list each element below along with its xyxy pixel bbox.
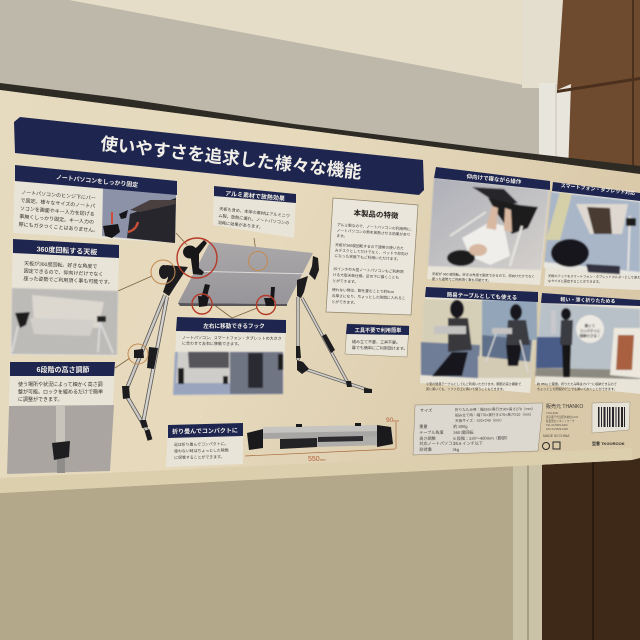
- caption: 小型の簡易テーブルとしてもご利用いただけます。脚部の高さ調節で: [426, 381, 521, 386]
- caption: [537, 381, 617, 391]
- spec values: 360 度回転: [453, 429, 474, 435]
- body text: ノートパソコン、スマートフォン・タブレットの大きさ: [182, 334, 282, 341]
- body text: になった状態でもご利用いただけます。: [334, 253, 401, 261]
- spec values: 折りたたみ時：幅550×奥行き90×高さ270（mm）: [455, 406, 535, 412]
- body text: ノートパソコンの熱を放熱させる効果があり: [337, 227, 411, 237]
- made in china: MADE IN CHINA: [543, 434, 570, 438]
- panel header: [168, 423, 243, 438]
- panel header: [10, 362, 115, 376]
- product: folded stand with dimensions: [245, 417, 399, 463]
- body text: 消耗に効果があります。: [217, 219, 263, 231]
- dimension lines: [245, 422, 396, 456]
- body text: 固定できるので、仰向けだけでなく: [24, 267, 104, 278]
- vendor name: 販売元 THANKO: [546, 403, 583, 410]
- spec values: 約 850g: [453, 423, 468, 429]
- photo: woman using tablet in bed: [544, 192, 640, 276]
- spec labels: サイズ: [420, 407, 432, 413]
- panel header: [13, 239, 119, 258]
- body text: アルミ製なので、ノートパソコンの利用時に、: [337, 222, 414, 232]
- body text: 誰でも簡単にご利用頂けます。: [352, 344, 408, 351]
- body text: の厚さになり、ちょっとした隙間に入れるこ: [332, 293, 406, 301]
- spec labels: [419, 407, 456, 452]
- caption: 約 850g と軽量。折りたたみ時はカバーに収納できるので: [537, 381, 617, 386]
- spec labels: 重量: [419, 423, 427, 429]
- body text: 際にもガタつくことはありません。: [18, 221, 98, 234]
- body text: 組み立て不要、工具不要。: [352, 338, 400, 345]
- spec values: 3kg: [452, 447, 460, 452]
- body text: ける大型天板仕様。足の下に置くことも: [333, 272, 400, 280]
- panel header: [176, 317, 286, 333]
- photo panel: smartphone and tablet: [544, 182, 640, 290]
- panel header: [214, 186, 296, 203]
- body text: 使わない時は、脚を畳むことで約9cm: [332, 287, 394, 294]
- photo: rotating top: [11, 288, 118, 355]
- body text: ノートパソコンのヒンジ下にバー: [21, 190, 96, 202]
- spec labels: 高さ調整: [419, 435, 436, 441]
- photo: woman holding folded stand: 軽くて: [585, 323, 596, 328]
- photo: woman on sofa with table: [421, 299, 537, 378]
- body text: [217, 205, 290, 233]
- spec values: 組み立て時：幅770×奥行き470×高さ510（mm）: [455, 412, 534, 417]
- caption: [548, 273, 640, 285]
- photo: laptop hinge bar: [102, 188, 176, 243]
- panel header: [15, 165, 177, 195]
- vendor address: T101-0021: [546, 411, 559, 415]
- photo panel: operating lying down: [427, 167, 550, 285]
- title text: 使いやすさを追求した様々な機能: [99, 134, 363, 182]
- spec labels: テーブル角度: [419, 429, 444, 435]
- body text: ム製。放熱に優れ、ノートパソコンの: [218, 212, 290, 226]
- body text: 使わない時はちょっとした隙間: [174, 448, 229, 453]
- heading text: 仰向けで寝ながら操作: [466, 172, 522, 186]
- dimension 90mm: 90mm: [386, 417, 399, 424]
- barcode bars: [598, 407, 625, 427]
- heading text: 6段階の高さ調節: [37, 365, 89, 374]
- body text: とができます。: [332, 299, 357, 305]
- photo panel: light and thin folding: [535, 293, 640, 394]
- body text: [332, 287, 406, 307]
- body text: [334, 242, 409, 262]
- caption: 床に置いても、ソファの上に置いて使うこともできます。: [426, 386, 506, 391]
- body text: [352, 338, 408, 351]
- body text: に保管することができます。: [174, 454, 224, 460]
- spec values: 15.6 インチ以下: [453, 441, 483, 446]
- body text: 天板も含め、本体の素材はアルミニウ: [219, 205, 290, 219]
- heading text: アルミ素材で放熱効果: [225, 189, 285, 203]
- left stand legs: [122, 265, 188, 440]
- vendor address: 秋葉原ロジネットワーク: [546, 419, 575, 423]
- vendor address: FAX 03-5529-4205: [546, 427, 568, 431]
- panel header: [434, 167, 550, 190]
- spec table: [413, 403, 543, 455]
- body text: みデスクとしてだけでなく、ベッドで仰向け: [335, 247, 409, 256]
- body text: [174, 441, 229, 460]
- body text: ます。: [336, 233, 347, 239]
- barcode: [592, 402, 630, 446]
- red callout circles: [177, 238, 276, 314]
- panel: movable hooks: [173, 317, 286, 395]
- spec labels: 対応ノートパソコン: [419, 440, 456, 446]
- orange callout circles: [128, 252, 268, 364]
- body text: 天板が360度回転するので通常の使い方た: [335, 242, 404, 251]
- caption: なサイズに固定することができます。: [548, 278, 602, 284]
- body text: [336, 222, 414, 243]
- body text: [18, 381, 103, 403]
- photo: height lock: [7, 405, 114, 474]
- product box: [0, 83, 640, 493]
- vendor address: [546, 411, 579, 431]
- body text: 座った姿勢でご利用頂く事も可能です。: [23, 275, 113, 286]
- spec values: [452, 406, 536, 452]
- spec labels: 耐荷重: [419, 446, 432, 452]
- photo: woman holding folded stand: 収納できる！: [580, 333, 600, 338]
- panel: folds compact: [166, 423, 243, 467]
- body text: 足は折り畳んでコンパクトに。: [174, 441, 228, 447]
- table top plate: [178, 242, 313, 304]
- folded stand: [247, 423, 393, 450]
- product: laptop table with stand: [122, 238, 372, 440]
- photo: woman holding folded stand: コンパクトに: [580, 328, 601, 333]
- body text: 使う場所や状況によって細かく高さ調: [18, 381, 103, 388]
- caption: 座った姿勢でご利用頂く事も可能です。: [432, 276, 491, 283]
- body text: 事無くしっかり固定。キー入力の: [19, 213, 94, 226]
- model number: 型番 TKGOROOK: [592, 440, 625, 446]
- heading text: ノートパソコンをしっかり固定: [56, 173, 139, 189]
- spec values: 6 段階：330〜480mm（脚部）: [453, 434, 510, 441]
- body text: で固定。様々なサイズのノートパ: [20, 197, 95, 210]
- heading text: スマートフォン・タブレット対応: [560, 182, 636, 197]
- heading text: 折り畳んでコンパクトに: [172, 426, 238, 436]
- heading text: 工具不要で利用簡単: [355, 326, 401, 334]
- heading text: 簡易テーブルとしても使える: [447, 290, 517, 302]
- panel: height adjustment: [7, 362, 115, 474]
- body text: とができます。: [332, 278, 358, 284]
- body text: [332, 266, 404, 286]
- photo: hooks and laptop: [173, 352, 283, 395]
- panel: product features: [326, 198, 418, 315]
- photo: woman holding folded stand: [535, 303, 640, 379]
- vendor address: 東京都千代田区外神田4-6-8: [546, 415, 579, 419]
- body text: [18, 190, 101, 234]
- heading text: 左右に移動できるフック: [203, 322, 265, 330]
- panel: aluminium: [213, 186, 296, 238]
- caption: 天板が 360 度回転。好きな角度で固定できるので、仰向けだけでなく: [432, 271, 535, 279]
- body text: [182, 334, 282, 347]
- heading text: 360度回転する天板: [36, 244, 98, 257]
- panel: 360 degree rotation: [10, 239, 119, 356]
- body text: [23, 260, 114, 286]
- title banner: [14, 117, 424, 195]
- body text: に調整ができます。: [18, 396, 63, 403]
- panel header: [552, 182, 640, 201]
- right stand legs: [296, 256, 372, 393]
- vendor information: [542, 403, 583, 450]
- body text: に合わせて左右に移動できます。: [182, 340, 242, 346]
- vendor address: TEL 03-5529-4200: [546, 423, 568, 427]
- panel header: [346, 324, 409, 335]
- heading: 本製品の特徴: [353, 207, 399, 221]
- caption: [432, 271, 535, 284]
- body text: 15インチの大型ノートパソコンもご利用頂: [333, 266, 404, 274]
- heading text: 軽い・薄く折りたためる: [560, 296, 616, 305]
- recycling icons: [542, 442, 560, 450]
- body text: ソコンを画面やキー入力を妨げる: [20, 205, 95, 218]
- panel: no tools: [345, 324, 409, 357]
- panel: secure laptop: [13, 165, 177, 243]
- hooks: [183, 240, 275, 307]
- callout leader lines: [115, 233, 257, 368]
- photo: woman lying under table: [428, 178, 549, 270]
- dimension 550mm: 550mm: [308, 456, 326, 463]
- caption: [426, 381, 521, 391]
- spec values: 天板サイズ：420×240（mm）: [455, 417, 504, 423]
- photo panel: simple table: [420, 287, 538, 393]
- caption: ちょっとした隙間のどこでも置いておくことができます。: [537, 386, 617, 391]
- body text: 天板が360度回転。好きな角度で: [24, 260, 98, 270]
- panel header: [541, 293, 640, 306]
- body text: 整が可能。ロックを緩めるだけで簡単: [18, 388, 103, 396]
- panel header: [425, 287, 538, 302]
